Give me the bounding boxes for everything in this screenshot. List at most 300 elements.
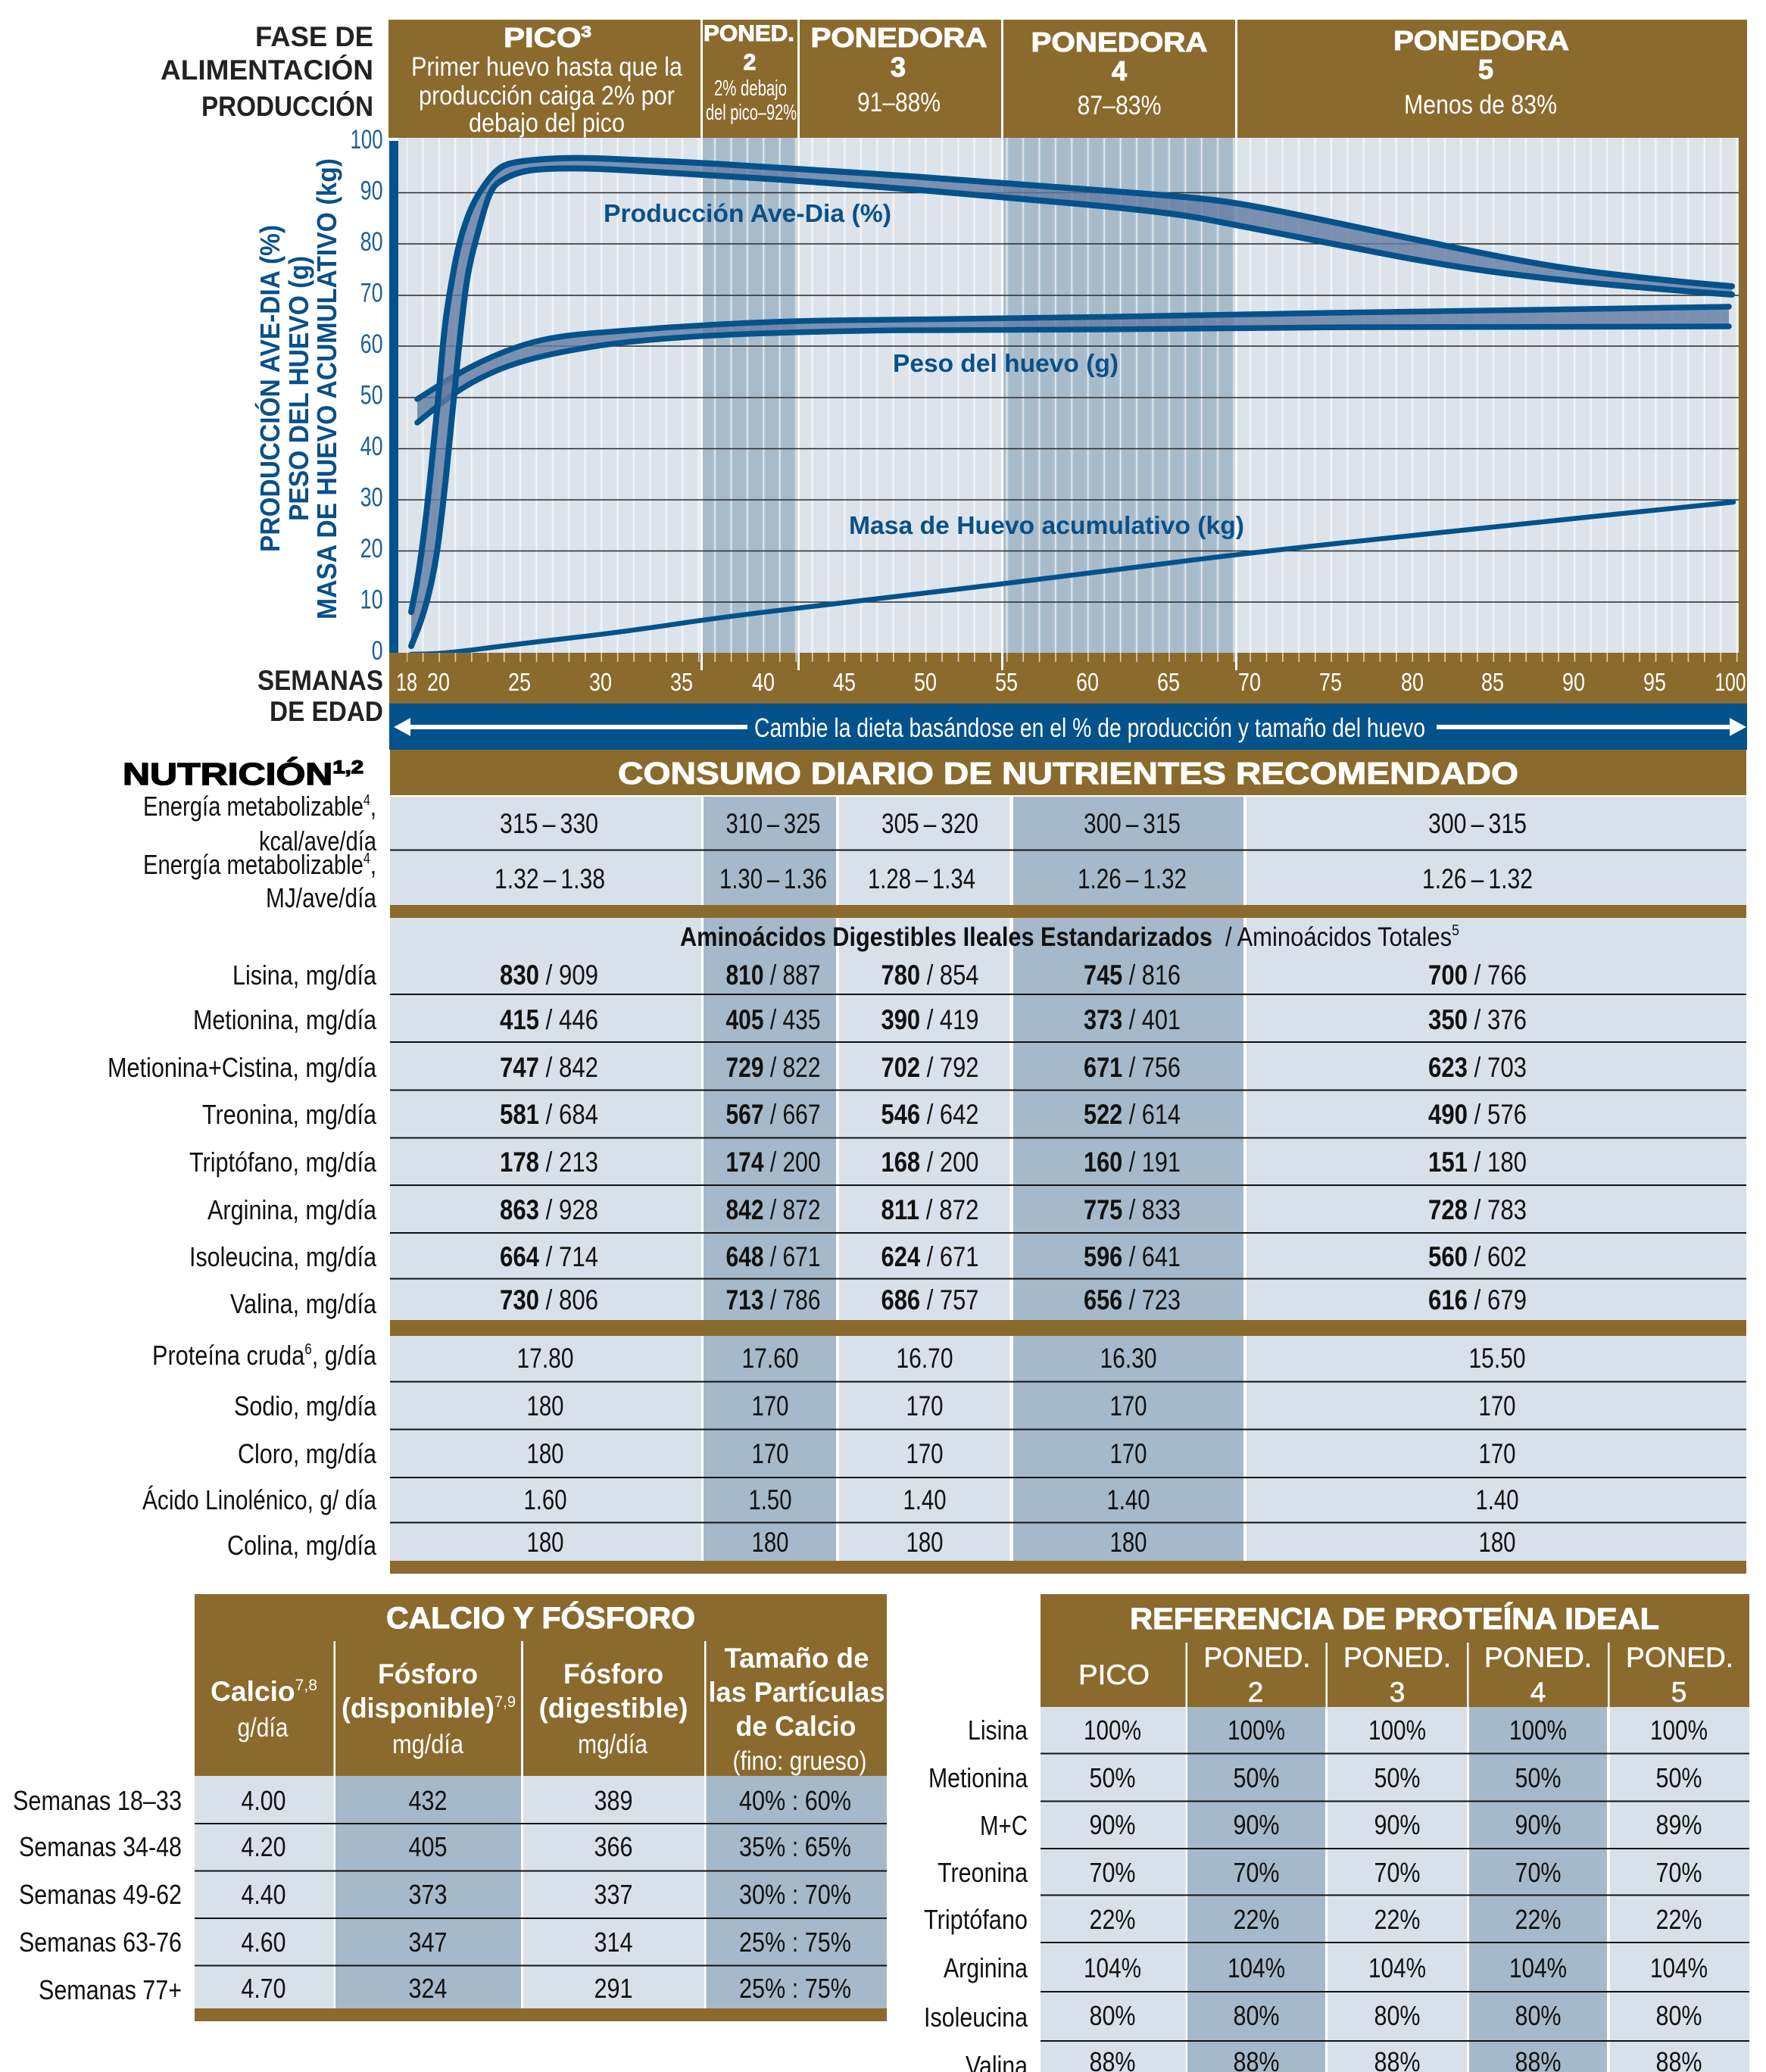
- column headers: PONED.: [1343, 1642, 1451, 1673]
- row: energía MJ: 4: [363, 850, 370, 867]
- row: proteína cruda: 16.30: [1100, 1343, 1157, 1374]
- y axis tick labels: 0: [372, 636, 383, 666]
- heading: referencia de proteína ideal: REFERENCIA DE PROTEÍNA IDEAL: [1130, 1602, 1659, 1636]
- row: semanas 77+: [39, 1973, 851, 2005]
- heading: calcio y fósforo: CALCIO Y FÓSFORO: [386, 1600, 695, 1635]
- row: semanas 63-76: [19, 1927, 851, 1958]
- table heading: consumo diario: [390, 750, 1746, 795]
- row: semanas 18-33: Semanas 18–33: [13, 1785, 182, 1816]
- y axis titles: PESO DEL HUEVO (g): [283, 256, 314, 521]
- row: metionina: 50%: [1233, 1762, 1280, 1793]
- row: metionina: 50%: [1374, 1762, 1421, 1793]
- row: semanas 49-62: Semanas 49-62: [19, 1879, 182, 1910]
- row: triptófano: 22%: [1515, 1904, 1562, 1935]
- y axis tick labels: [351, 125, 383, 666]
- row: arginina: Arginina, mg/día: [207, 1194, 377, 1225]
- row: valina: 686 / 757: [881, 1284, 978, 1315]
- y axis tick labels: 50: [360, 380, 383, 410]
- row: semanas 34-48: [19, 1831, 851, 1862]
- row: treonina: [938, 1857, 1702, 1888]
- row: semanas 63-76: 4.60: [241, 1927, 286, 1958]
- row: energía kcal: 300 – 315: [1428, 808, 1527, 839]
- row: colina: Colina, mg/día: [227, 1530, 377, 1561]
- row: metionina: 350 / 376: [1428, 1004, 1527, 1035]
- row: M+C: [980, 1809, 1702, 1841]
- row: lisina: 100%: [1368, 1715, 1426, 1746]
- row: treonina: 70%: [1655, 1857, 1702, 1888]
- row: cloro: Cloro, mg/día: [238, 1438, 377, 1469]
- row: lisina: 100%: [1509, 1715, 1567, 1746]
- column header: fósforo digestible: [539, 1659, 688, 1759]
- row: lisina: 100%: [1084, 1715, 1141, 1746]
- row: metionina+cistina: [108, 1052, 1527, 1083]
- row: proteína cruda: Proteína cruda: [152, 1340, 331, 1371]
- row: metionina: Metionina, mg/día: [193, 1004, 377, 1035]
- row: arginina: 863 / 928: [500, 1194, 598, 1225]
- row: arginina: 104%: [1650, 1952, 1708, 1983]
- column headers: 4: [1530, 1677, 1546, 1708]
- phase: ponedora 4: 87–83%: [1077, 91, 1162, 120]
- row: metionina: 390 / 419: [881, 1004, 978, 1035]
- row: energía kcal: 4: [363, 792, 370, 809]
- row: triptófano: 168 / 200: [881, 1147, 978, 1178]
- row: semanas 63-76: 25% : 75%: [739, 1927, 851, 1958]
- column header: calcio: Calcio: [211, 1676, 295, 1707]
- column header: fósforo disponible: mg/día: [392, 1730, 463, 1759]
- y axis tick labels: 30: [360, 483, 383, 512]
- row: metionina: [928, 1762, 1702, 1793]
- row: ácido linolénico: [142, 1484, 1519, 1515]
- y axis tick labels: 70: [360, 279, 383, 307]
- row: metionina: 50%: [1089, 1762, 1136, 1793]
- row: triptófano: Triptófano, mg/día: [189, 1147, 377, 1178]
- column header: tamaño de partículas: (fino: grueso): [733, 1746, 866, 1776]
- row: M+C: 90%: [1089, 1809, 1136, 1840]
- label: semanas de edad: DE EDAD: [270, 696, 383, 727]
- row: ácido linolénico: 1.40: [1475, 1484, 1519, 1515]
- row: triptófano: 22%: [1374, 1904, 1421, 1935]
- row: triptófano: [924, 1904, 1702, 1935]
- row: lisina: 100%: [1228, 1715, 1285, 1746]
- column headers: 2: [1248, 1677, 1263, 1708]
- phase: ponedora 2: del pico–92%: [706, 101, 797, 125]
- row: semanas 77+: 291: [594, 1973, 633, 2004]
- row: triptófano: 22%: [1655, 1904, 1702, 1935]
- row: valina: 656 / 723: [1084, 1284, 1181, 1315]
- week tick labels: 25: [508, 668, 531, 696]
- phase: pico: producción caiga 2% por: [419, 81, 675, 111]
- row: semanas 77+: 4.70: [241, 1973, 286, 2004]
- row: arginina: 728 / 783: [1428, 1194, 1527, 1225]
- row: energía MJ: MJ/ave/día: [266, 882, 377, 913]
- row: ácido linolénico: 1.50: [748, 1484, 792, 1515]
- row: cloro: 180: [527, 1438, 563, 1469]
- row: metionina+cistina: 747 / 842: [500, 1052, 598, 1083]
- row: metionina: 415 / 446: [500, 1004, 598, 1035]
- label: semanas de edad: [257, 665, 383, 727]
- row: arginina: [207, 1194, 1527, 1225]
- column headers: 5: [1671, 1677, 1686, 1708]
- week tick labels: 40: [752, 668, 775, 696]
- row: semanas 18-33: 432: [409, 1785, 447, 1816]
- row: energía MJ: Energía metabolizable: [143, 849, 414, 880]
- week tick labels: 100: [1715, 668, 1746, 696]
- column header: tamaño de partículas: de Calcio: [736, 1711, 856, 1742]
- row: isoleucina: 560 / 602: [1428, 1241, 1527, 1272]
- column headers: 3: [1390, 1677, 1405, 1708]
- week tick labels: 85: [1481, 668, 1504, 696]
- row: metionina+cistina: Metionina+Cistina, mg/día: [108, 1052, 377, 1083]
- phase: pico: Primer huevo hasta que la: [411, 52, 682, 82]
- label: semanas de edad: SEMANAS: [257, 665, 383, 696]
- row: arginina: 811 / 872: [881, 1194, 978, 1225]
- row: lisina: 830 / 909: [500, 960, 598, 991]
- phase: ponedora 3: 3: [891, 51, 906, 83]
- row: sodio: 170: [906, 1390, 944, 1421]
- y axis tick labels: 20: [360, 534, 383, 563]
- row: energía MJ: 1.32 – 1.38: [495, 863, 605, 894]
- row: energía kcal: Energía metabolizable: [143, 791, 414, 822]
- column header: fósforo disponible: 7,9: [495, 1693, 516, 1711]
- row: semanas 34-48: 405: [409, 1831, 447, 1862]
- week tick labels: 65: [1157, 668, 1180, 696]
- row: proteína cruda: [152, 1340, 1525, 1374]
- phase: ponedora 5: PONEDORA: [1393, 25, 1569, 56]
- y axis tick labels: 90: [360, 176, 383, 206]
- row: metionina: Metionina: [928, 1762, 1028, 1793]
- week tick labels: 90: [1562, 668, 1585, 696]
- phase: ponedora 4: 4: [1112, 55, 1127, 86]
- row: colina: 180: [1478, 1527, 1516, 1558]
- row: triptófano: 174 / 200: [725, 1147, 821, 1178]
- week tick labels: 20: [427, 668, 450, 696]
- row: semanas 63-76: Semanas 63-76: [19, 1927, 182, 1958]
- column header: tamaño de partículas: Tamaño de: [724, 1643, 869, 1674]
- week tick labels: 75: [1319, 668, 1342, 696]
- row: semanas 18-33: [13, 1785, 851, 1816]
- y axis titles: MASA DE HUEVO ACUMULATIVO (kg): [311, 158, 342, 619]
- phase: ponedora 3: 91–88%: [857, 88, 941, 117]
- row: colina: 180: [1110, 1527, 1147, 1558]
- row: triptófano: 22%: [1089, 1904, 1136, 1935]
- row: sodio: 180: [527, 1390, 563, 1421]
- row: metionina: 373 / 401: [1084, 1004, 1181, 1035]
- row: M+C: 90%: [1233, 1809, 1280, 1840]
- row: metionina+cistina: 671 / 756: [1084, 1052, 1181, 1083]
- row: arginina: 104%: [1368, 1952, 1426, 1983]
- row: metionina+cistina: 623 / 703: [1428, 1052, 1527, 1083]
- row: semanas 77+: 25% : 75%: [739, 1973, 851, 2004]
- row: semanas 77+: 324: [409, 1973, 447, 2004]
- row: arginina: 104%: [1228, 1952, 1285, 1983]
- row: energía kcal: kcal/ave/día: [259, 825, 377, 857]
- row: semanas 18-33: 40% : 60%: [739, 1785, 851, 1816]
- row: isoleucina: 596 / 641: [1084, 1241, 1181, 1272]
- row: treonina: Treonina: [938, 1857, 1028, 1888]
- row: semanas 49-62: 30% : 70%: [739, 1879, 851, 1910]
- phase: ponedora 3: PONEDORA: [810, 22, 988, 53]
- column headers: PICO: [1078, 1659, 1150, 1690]
- subheading: aminoácidos: Aminoácidos Digestibles Ileales Estandarizados: [680, 922, 1212, 952]
- column header: fósforo digestible: Fósforo: [563, 1659, 663, 1690]
- row: arginina: 104%: [1509, 1952, 1567, 1983]
- row: sodio: 170: [1478, 1390, 1516, 1421]
- row: isoleucina: 624 / 671: [881, 1241, 978, 1272]
- row: valina: Valina, mg/día: [230, 1288, 377, 1319]
- y axis titles: [254, 158, 342, 619]
- y axis tick labels: 80: [360, 227, 383, 257]
- row: energía kcal: [143, 791, 1527, 857]
- chart: production curves by week of age: [254, 125, 1747, 666]
- banner: cambie la dieta: Cambie la dieta basándose en el % de producción y tamaño del huevo: [754, 713, 1425, 743]
- row: metionina: 50%: [1655, 1762, 1702, 1793]
- row: energía MJ: 1.26 – 1.32: [1078, 863, 1187, 894]
- row: treonina: 70%: [1374, 1857, 1421, 1888]
- curve: producción ave-día: [411, 158, 1732, 646]
- column headers: PONED.: [1626, 1642, 1733, 1673]
- subheading: aminoácidos: / Aminoácidos Totales: [1225, 922, 1481, 952]
- week tick labels: 18: [396, 668, 417, 696]
- row: treonina: Treonina, mg/día: [202, 1099, 377, 1130]
- column headers: PONED.: [1204, 1642, 1310, 1673]
- row: ácido linolénico: 1.60: [524, 1484, 566, 1515]
- heading: fase de alimentación producción: PRODUCCIÓN: [201, 90, 373, 122]
- row: energía kcal: 305 – 320: [881, 808, 978, 839]
- y axis titles: PRODUCCIÓN AVE-DIA (%): [254, 225, 285, 552]
- y axis tick labels: 100: [351, 125, 383, 154]
- phase: ponedora 4: [1031, 27, 1207, 120]
- row: energía kcal: ,: [370, 791, 376, 822]
- row: lisina: [968, 1715, 1708, 1746]
- row: energía MJ: 1.26 – 1.32: [1422, 863, 1533, 894]
- curve: peso del huevo: [417, 307, 1729, 423]
- phase: ponedora 2: PONED.: [704, 21, 794, 46]
- phase: ponedora 2: 2% debajo: [714, 76, 787, 101]
- row: isoleucina: Isoleucina: [924, 2002, 1028, 2033]
- row: cloro: [238, 1438, 1516, 1469]
- row: lisina: 100%: [1650, 1715, 1708, 1746]
- panel: referencia de proteína ideal: [924, 1594, 1749, 2072]
- row: lisina: 700 / 766: [1428, 960, 1527, 991]
- row: ácido linolénico: 1.40: [903, 1484, 947, 1515]
- heading: fase de alimentación producción: [161, 21, 373, 122]
- row: cloro: 170: [1478, 1438, 1516, 1469]
- week tick labels: 35: [670, 668, 693, 696]
- row: ácido linolénico: Ácido Linolénico, g/ día: [142, 1484, 377, 1515]
- row: colina: [227, 1527, 1516, 1561]
- panel: calcio y fósforo: [13, 1594, 887, 2021]
- row: arginina: 842 / 872: [725, 1194, 821, 1225]
- row: treonina: 70%: [1089, 1857, 1136, 1888]
- heading: nutrición: 1,2: [332, 757, 363, 778]
- row: lisina: Lisina, mg/día: [232, 960, 377, 991]
- row: semanas 49-62: 337: [594, 1879, 633, 1910]
- week tick labels: 95: [1643, 668, 1666, 696]
- row: arginina: [944, 1952, 1708, 1983]
- row: semanas 63-76: 347: [409, 1927, 447, 1958]
- row: triptófano: 160 / 191: [1084, 1147, 1181, 1178]
- row: energía MJ: 1.28 – 1.34: [868, 863, 975, 894]
- table heading: consumo diario: CONSUMO DIARIO DE NUTRIENTES RECOMENDADO: [618, 756, 1518, 791]
- row: sodio: 170: [1110, 1390, 1147, 1421]
- arrow: left: [394, 718, 747, 736]
- row: semanas 34-48: 366: [594, 1831, 633, 1862]
- column header: tamaño de partículas: [709, 1643, 885, 1776]
- phase: pico: [411, 22, 682, 138]
- row: ácido linolénico: 1.40: [1107, 1484, 1150, 1515]
- row: triptófano: [189, 1147, 1527, 1178]
- row: energía MJ: [143, 849, 1533, 913]
- column header: calcio: [211, 1676, 317, 1743]
- row: isoleucina: [189, 1241, 1527, 1272]
- week tick labels: [396, 668, 1746, 696]
- row: metionina+cistina: 702 / 792: [881, 1052, 978, 1083]
- row: isoleucina: 80%: [1515, 2000, 1562, 2031]
- curve label: producción: Producción Ave-Dia (%): [604, 199, 891, 227]
- week tick labels: 55: [995, 668, 1018, 696]
- phase: pico: debajo del pico: [469, 108, 625, 138]
- row: triptófano: Triptófano: [924, 1904, 1028, 1935]
- row: treonina: 70%: [1233, 1857, 1280, 1888]
- row: treonina: 567 / 667: [725, 1099, 821, 1130]
- subheading: aminoácidos: 5: [1452, 922, 1459, 939]
- row: isoleucina: [924, 2000, 1702, 2033]
- row: lisina: 780 / 854: [881, 960, 978, 991]
- column headers: PONED.: [1484, 1642, 1592, 1673]
- row: lisina: [232, 960, 1527, 991]
- row: arginina: Arginina: [944, 1952, 1028, 1983]
- row: lisina: 745 / 816: [1084, 960, 1181, 991]
- row: M+C: 90%: [1515, 1809, 1562, 1840]
- row: triptófano: 22%: [1233, 1904, 1280, 1935]
- row: energía kcal: 310 – 325: [725, 808, 821, 839]
- y axis tick labels: 10: [360, 585, 383, 615]
- row: cloro: 170: [751, 1438, 789, 1469]
- row: treonina: 490 / 576: [1428, 1099, 1527, 1130]
- row: semanas 34-48: 4.20: [241, 1831, 286, 1862]
- y axis tick labels: 60: [360, 329, 383, 359]
- row: metionina: [193, 1004, 1527, 1035]
- column header: calcio: g/día: [238, 1713, 289, 1743]
- week tick labels: 45: [833, 668, 856, 696]
- column header: fósforo disponible: (disponible): [342, 1693, 501, 1724]
- row: treonina: 546 / 642: [881, 1099, 978, 1130]
- week tick labels: 70: [1238, 668, 1261, 696]
- row: treonina: 581 / 684: [500, 1099, 598, 1130]
- row: M+C: 90%: [1374, 1809, 1421, 1840]
- row: energía kcal: 315 – 330: [500, 808, 598, 839]
- arrow: right: [1437, 718, 1746, 736]
- row: colina: 180: [527, 1527, 563, 1558]
- row: valina: 713 / 786: [725, 1284, 821, 1315]
- y axis bar: [389, 141, 398, 654]
- x axis: semanas de edad: [257, 653, 1747, 727]
- row: lisina: 810 / 887: [725, 960, 821, 991]
- week tick labels: 50: [914, 668, 937, 696]
- row: arginina: 775 / 833: [1084, 1194, 1181, 1225]
- row: isoleucina: 80%: [1374, 2000, 1421, 2031]
- row: arginina: 104%: [1084, 1952, 1141, 1983]
- row: proteína cruda: 17.60: [742, 1343, 798, 1374]
- row: treonina: [202, 1099, 1527, 1130]
- heading: fase de alimentación producción: FASE DE: [255, 21, 373, 52]
- row: colina: 180: [906, 1527, 944, 1558]
- row: valina: 730 / 806: [500, 1284, 598, 1315]
- row: semanas 18-33: 389: [594, 1785, 633, 1816]
- week tick labels: 80: [1401, 668, 1424, 696]
- phase: pico: 3: [581, 23, 591, 41]
- row: valina: [230, 1284, 1527, 1319]
- row: semanas 49-62: 373: [409, 1879, 447, 1910]
- row: sodio: 170: [751, 1390, 789, 1421]
- row: M+C: 89%: [1655, 1809, 1702, 1840]
- row: isoleucina: 80%: [1089, 2000, 1136, 2031]
- phase: ponedora 4: PONEDORA: [1031, 27, 1207, 58]
- row: semanas 77+: Semanas 77+: [39, 1974, 182, 2005]
- row: semanas 34-48: 35% : 65%: [739, 1831, 851, 1862]
- phase: ponedora 5: 5: [1478, 54, 1493, 85]
- row: isoleucina: Isoleucina, mg/día: [189, 1241, 377, 1272]
- panel: nutrition table: [108, 750, 1746, 1574]
- row: valina: 616 / 679: [1428, 1284, 1527, 1315]
- banner: cambie la dieta: [389, 704, 1747, 750]
- week tick labels: 60: [1076, 668, 1099, 696]
- column header: fósforo digestible: mg/día: [578, 1730, 647, 1759]
- row: triptófano: 151 / 180: [1428, 1147, 1527, 1178]
- curve label: masa: Masa de Huevo acumulativo (kg): [849, 511, 1244, 539]
- phase: ponedora 5: [1393, 25, 1569, 120]
- row: semanas 18-33: 4.00: [241, 1785, 286, 1816]
- row: triptófano: 178 / 213: [500, 1147, 598, 1178]
- row: isoleucina: 80%: [1233, 2000, 1280, 2031]
- row: semanas 63-76: 314: [594, 1927, 633, 1958]
- panel: feeding phase header: [161, 20, 1747, 138]
- row: valina: [966, 2046, 1702, 2072]
- row: metionina+cistina: 729 / 822: [725, 1052, 821, 1083]
- row: isoleucina: 648 / 671: [725, 1241, 821, 1272]
- row: cloro: 170: [906, 1438, 944, 1469]
- phase: ponedora 3: [810, 22, 988, 117]
- row: colina: 180: [751, 1527, 789, 1558]
- row: semanas 49-62: [19, 1879, 851, 1910]
- column headers: [1078, 1642, 1733, 1708]
- row: semanas 49-62: 4.40: [241, 1879, 286, 1910]
- row: M+C: M+C: [980, 1810, 1028, 1841]
- row: treonina: 70%: [1515, 1857, 1562, 1888]
- row: isoleucina: 664 / 714: [500, 1241, 598, 1272]
- column header: calcio: 7,8: [295, 1677, 317, 1694]
- row: metionina: 405 / 435: [725, 1004, 821, 1035]
- row: lisina: Lisina: [968, 1715, 1028, 1746]
- phase: ponedora 2: 2: [744, 50, 756, 75]
- column header: tamaño de partículas: las Partículas: [709, 1677, 885, 1708]
- phase: ponedora 5: Menos de 83%: [1404, 90, 1557, 120]
- row: proteína cruda: 6: [304, 1341, 312, 1358]
- column header: fósforo disponible: Fósforo: [378, 1659, 478, 1690]
- row: energía kcal: 300 – 315: [1084, 808, 1181, 839]
- row: treonina: 522 / 614: [1084, 1099, 1181, 1130]
- row: metionina: 50%: [1515, 1762, 1562, 1793]
- column header: fósforo disponible: [342, 1659, 516, 1759]
- row: semanas 34-48: Semanas 34-48: [19, 1831, 182, 1862]
- heading: nutrición: NUTRICIÓN: [123, 757, 295, 791]
- y axis tick labels: 40: [360, 432, 383, 461]
- row: cloro: 170: [1110, 1438, 1147, 1469]
- column header: fósforo digestible: (digestible): [539, 1693, 688, 1724]
- phase: pico: PICO: [504, 22, 570, 53]
- row: proteína cruda: 15.50: [1469, 1343, 1525, 1374]
- curve: masa de huevo acumulativo: [411, 502, 1733, 654]
